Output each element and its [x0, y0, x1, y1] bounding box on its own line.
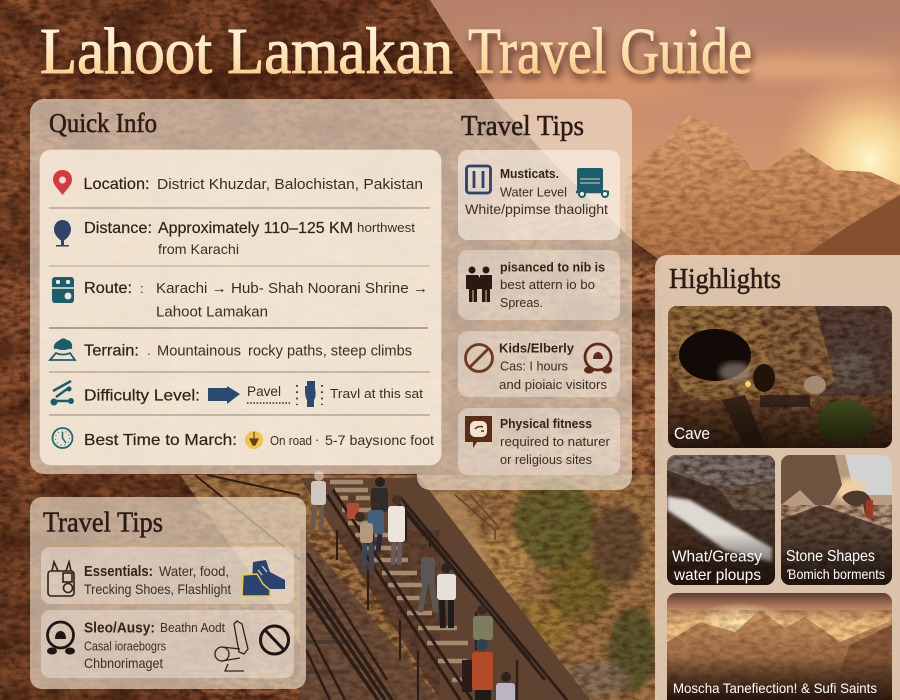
row: difficulty level: Pavel [247, 383, 281, 399]
row: distance: from Karachi [158, 241, 239, 257]
card: distanced: Spreas. [500, 295, 543, 310]
card: kids and elderly: and pioiaic visitors [499, 377, 608, 392]
row: route: Lahoot Lamakan [156, 304, 268, 320]
label: cave: Cave [674, 424, 710, 443]
card: quick info rows [40, 150, 441, 465]
row: route: Karachi → Hub- Shah Noorani Shrine → [156, 280, 428, 297]
label: mountain highlight: Moscha Tanefiection! & Sufi Saints [673, 680, 877, 696]
bottom left rock darkening [0, 480, 190, 700]
row: distance: Approximately 110–125 KM [158, 220, 353, 237]
card: essentials [41, 547, 294, 604]
heading: highlights: Highlights [669, 264, 781, 295]
row: location: Location: [84, 176, 150, 193]
card: kids and elderly: Kids/Elberly [499, 340, 575, 356]
railings [195, 475, 567, 700]
visitors on the stairs [311, 471, 515, 700]
row: terrain: rocky paths, steep climbs [248, 342, 412, 360]
photo: cave [668, 306, 892, 448]
steps [330, 482, 490, 680]
card: distanced [458, 250, 620, 320]
panel: quick info [40, 108, 441, 465]
icon: truck arrow [208, 386, 240, 404]
row: best time: Best Time to March: [84, 432, 237, 449]
icon: badge [47, 622, 75, 654]
card: kids and elderly: Cas: I hours [500, 358, 568, 374]
row: route: Route: [84, 280, 132, 297]
card: essentials: Essentials: [84, 563, 153, 580]
title [40, 15, 752, 88]
panel: lower travel tips [30, 497, 306, 689]
photo: waterfall [667, 455, 775, 585]
card: distanced: pisanced to nib is [500, 260, 605, 274]
panel: travel tips column [458, 111, 620, 475]
photo: mountain range [667, 593, 892, 700]
card: musticats: Water Level [500, 184, 567, 200]
card: physical fitness [458, 408, 620, 475]
row: route: : [140, 281, 144, 296]
icon: backpack [48, 562, 74, 596]
card: essentials: Water, food, [159, 563, 229, 579]
hillside around the stairs [180, 475, 662, 700]
card: essentials: Trecking Shoes, Flashlight [84, 581, 231, 597]
row: route [52, 277, 428, 320]
row: best time [52, 428, 434, 449]
row: terrain [50, 338, 412, 360]
card: physical fitness: or religious sites [500, 452, 592, 467]
panel: highlights [655, 255, 900, 700]
row: distance: horthwest [357, 220, 415, 235]
photo: waterfall: water ploups [673, 567, 761, 584]
label: stone shapes: Stone Shapes [786, 548, 875, 565]
row: best time: 5-7 baysıonc foot [325, 432, 434, 448]
row: distance [54, 220, 415, 257]
card: distanced: best attern io bo [500, 277, 595, 292]
icon: trekking tool [215, 621, 248, 671]
icon: no sign [260, 626, 288, 654]
row: difficulty level: Difficulty Level: [84, 388, 200, 404]
card: physical fitness: Physical fitness [500, 416, 592, 431]
card: kids and elderly [458, 331, 620, 397]
card: sleep and busy: Chbnorimaget [84, 655, 163, 671]
row: terrain: Terrain: [84, 342, 139, 360]
card: physical fitness: required to naturer [500, 434, 611, 449]
icon: hand [305, 381, 316, 407]
row: location [53, 170, 423, 195]
card: musticats: Musticats. [500, 166, 559, 181]
row: best time: On road [270, 433, 312, 448]
row: terrain: Mountainous [157, 342, 241, 360]
row: location: District Khuzdar, Balochistan, Pakistan [157, 176, 423, 193]
card: sleep and busy [41, 610, 294, 678]
photo: stone shapes: Ɓomich borments [787, 566, 885, 582]
row: difficulty level [50, 381, 423, 407]
card: sleep and busy: Sleo/Ausy: [84, 620, 155, 636]
card: sleep and busy: Casal ioraebogrs [84, 638, 166, 654]
card: sleep and busy: Beathn Aodt [160, 620, 225, 635]
label: waterfall: What/Greasy [672, 548, 762, 566]
title: Travel Guide [468, 15, 752, 88]
heading: lower travel tips: Travel Tips [43, 508, 163, 538]
icon: sun badge [245, 431, 263, 449]
card: musticats [458, 150, 620, 240]
panel: quick info and travel tips frosted container [30, 99, 632, 490]
card: musticats: White/ppimse thaolight [465, 201, 608, 217]
row: difficulty level: Travl at this sat [330, 386, 423, 401]
row: distance: Distance: [84, 220, 152, 237]
row: terrain: . [147, 343, 151, 358]
icon: boots [242, 560, 285, 596]
title: Lahoot Lamakan [40, 15, 453, 88]
photo: stone shapes [781, 455, 892, 585]
heading: travel tips: Travel Tips [461, 111, 584, 142]
row: best time: · [315, 432, 319, 447]
heading: quick info: Quick Info [49, 108, 157, 138]
